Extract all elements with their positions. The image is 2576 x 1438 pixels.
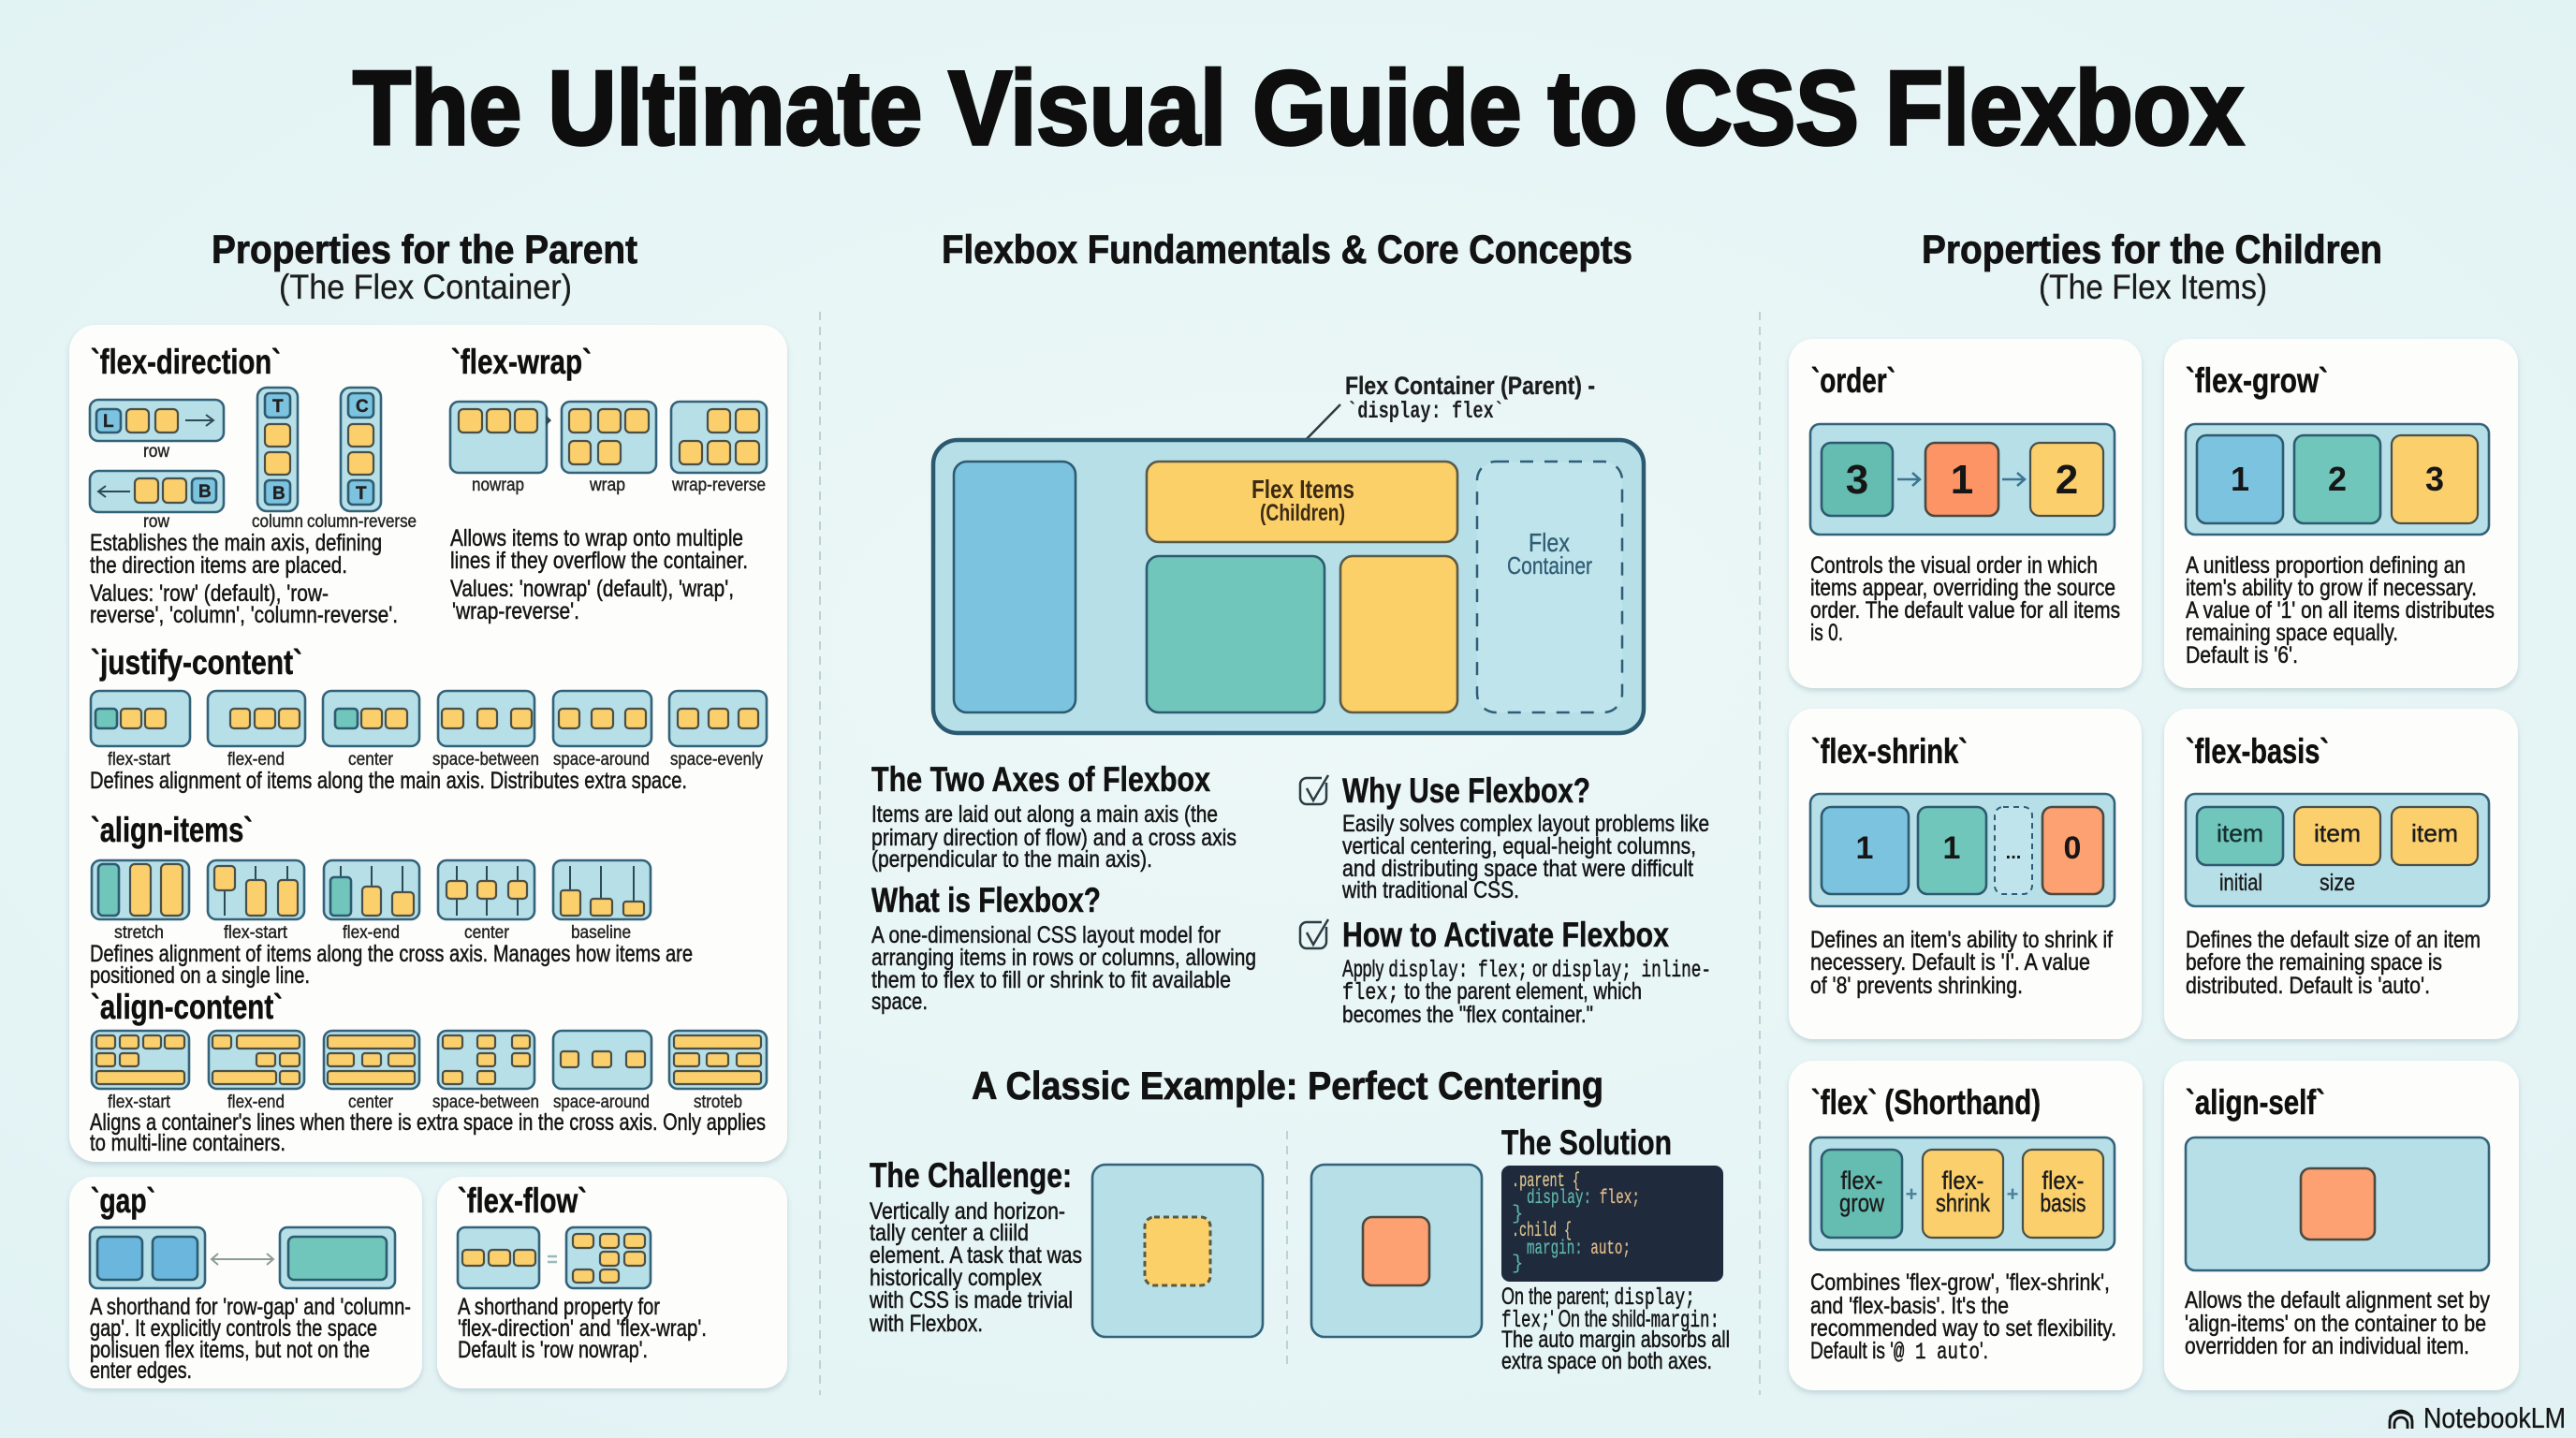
card: order: is 0. [1810, 620, 1843, 646]
flex-grow diagram: 2 [2328, 460, 2347, 498]
order diagram: 3 [1846, 457, 1868, 503]
diagram callout label: Flex Container (Parent) - [1345, 372, 1595, 400]
card: flex-grow: A unitless proportion defining an [2186, 552, 2466, 579]
flex items: Flex Items [1251, 475, 1354, 504]
align-items section [90, 811, 693, 989]
diagram callout label [1296, 372, 1595, 449]
text: why use flexbox: vertical centering, equal-height columns, [1342, 833, 1696, 859]
flex-direction section: row [143, 442, 169, 462]
the challenge [869, 1156, 1082, 1337]
align-items section: flex-end [343, 923, 400, 943]
flex-direction section [90, 343, 417, 628]
card: flex shorthand: recommended way to set flexibility. [1810, 1315, 2116, 1342]
flex-wrap section: Values: 'nowrap' (default), 'wrap', [450, 576, 734, 602]
text: how to activate flexbox [1300, 916, 1711, 1028]
flex shorthand diagram: shrink [1936, 1189, 1990, 1217]
card: flex-grow [2164, 339, 2518, 688]
card: flex-shrink: necessery. Default is 'I'. A value [1810, 949, 2090, 976]
align-items section: baseline [571, 923, 631, 943]
flex-direction section: B [198, 482, 212, 502]
flex-basis diagram: item [2411, 819, 2458, 847]
flex-direction section: T [272, 397, 284, 417]
code block: display: flex; [1527, 1188, 1640, 1210]
align-content section: stroteb [694, 1093, 742, 1112]
text: how to activate flexbox: becomes the "flex container." [1342, 1002, 1593, 1028]
the challenge: historically complex [870, 1265, 1042, 1291]
title: The Ultimate Visual Guide to CSS Flexbox [353, 50, 2244, 167]
flex shorthand diagram: grow [1839, 1189, 1884, 1217]
card: flex-shrink: of '8' prevents shrinking. [1810, 973, 2023, 999]
card: flex-basis: distributed. Default is 'auto'. [2186, 973, 2430, 999]
flex-basis diagram: size [2320, 870, 2355, 896]
card: order: items appear, overriding the source [1810, 575, 2115, 601]
the challenge: The Challenge: [870, 1156, 1072, 1195]
align-items section: positioned on a single line. [90, 962, 310, 989]
flex-grow diagram: 3 [2425, 460, 2444, 498]
justify-content section: Defines alignment of items along the main axis. Distributes extra space. [90, 768, 687, 794]
icon: checkbox [1300, 775, 1328, 804]
flex-shrink diagram [1810, 794, 2115, 906]
text: two axes [871, 760, 1237, 873]
justify-content section: center [348, 750, 394, 770]
align-content section: space-between [432, 1093, 539, 1112]
heading: children properties: (The Flex Items) [2039, 268, 2267, 306]
align-content section: flex-start [108, 1093, 171, 1112]
card: align-self: overridden for an individual item. [2185, 1333, 2469, 1359]
flex shorthand diagram: + [2007, 1182, 2018, 1206]
text: two axes: primary direction of flow) and a cross axis [871, 825, 1237, 851]
code block: } [1512, 1254, 1524, 1275]
the challenge: element. A task that was [870, 1242, 1082, 1269]
code block: margin: auto; [1527, 1239, 1631, 1260]
flex-wrap section [450, 343, 767, 624]
text: what is flexbox: What is Flexbox? [871, 881, 1101, 919]
panel: gap [69, 1177, 422, 1388]
heading: children properties [1922, 227, 2382, 306]
flex-wrap section: 'wrap-reverse'. [452, 598, 579, 624]
card: flex shorthand: Default is '@ 1 auto'. [1810, 1338, 1988, 1366]
flex-direction section: Establishes the main axis, defining [90, 530, 382, 556]
text: how to activate flexbox: Apply display: flex; or display; inline- [1342, 956, 1711, 984]
code block [1501, 1166, 1723, 1282]
flex container diagram [933, 372, 1644, 733]
flex shorthand diagram: basis [2041, 1189, 2086, 1217]
text: why use flexbox [1300, 771, 1709, 903]
panel: gap: gap'. It explicitly controls the space [90, 1315, 377, 1342]
card: align-self: Allows the default alignment set by [2185, 1287, 2490, 1313]
flex-shrink diagram: 1 [1943, 830, 1960, 866]
code block: .parent { [1512, 1171, 1580, 1193]
text: why use flexbox: and distributing space that were difficult [1342, 856, 1693, 882]
align-content section: center [348, 1093, 394, 1112]
align-items section: stretch [114, 923, 164, 943]
card: flex-basis: before the remaining space is [2186, 949, 2442, 976]
panel: flex-flow: Default is 'row nowrap'. [458, 1337, 648, 1363]
align-content section: flex-end [227, 1093, 285, 1112]
text: two axes: (perpendicular to the main axis). [871, 846, 1152, 873]
panel: flex container properties [69, 325, 787, 1162]
text: why use flexbox: Why Use Flexbox? [1342, 771, 1590, 810]
flex-direction section: T [356, 484, 367, 504]
flex-shrink diagram: ... [2006, 843, 2021, 863]
justify-content section: space-between [432, 750, 539, 770]
justify-content section: space-around [553, 750, 650, 770]
diagram: centered box [1311, 1165, 1482, 1337]
heading: children properties: Properties for the Children [1922, 227, 2382, 272]
order diagram [1810, 424, 2115, 535]
flex-basis diagram: initial [2219, 870, 2262, 896]
align-content section: `align-content` [91, 988, 283, 1026]
justify-content section: flex-start [108, 750, 171, 770]
align-self diagram [2186, 1137, 2489, 1270]
card: flex-shrink [1789, 709, 2142, 1039]
flex-basis diagram: item [2314, 819, 2361, 847]
flex-flow diagram [458, 1227, 651, 1288]
card: flex shorthand: Combines 'flex-grow', 'flex-shrink', [1810, 1269, 2110, 1296]
panel: flex-flow [437, 1177, 787, 1388]
flex-direction section: B [272, 484, 285, 504]
panel: gap: enter edges. [90, 1357, 192, 1384]
text: how to activate flexbox: How to Activate Flexbox [1342, 916, 1669, 954]
card: order [1789, 339, 2142, 688]
panel: gap: polisuen flex items, but not on the [90, 1337, 370, 1363]
flex-shrink diagram: 0 [2064, 830, 2081, 866]
the solution: flex;' On the shild-margin: [1501, 1306, 1720, 1334]
flex-direction section: reverse', 'column', 'column-reverse'. [90, 602, 398, 628]
flex-shrink diagram: 1 [1856, 830, 1873, 866]
panel: flex-flow: `flex-flow` [458, 1181, 587, 1220]
card: flex-grow: remaining space equally. [2186, 620, 2398, 646]
card: flex-basis: `flex-basis` [2186, 732, 2329, 770]
flex shorthand diagram [1810, 1137, 2115, 1250]
justify-content section: `justify-content` [91, 643, 302, 682]
flex-basis diagram [2186, 794, 2489, 906]
heading: parent properties: Properties for the Parent [212, 227, 637, 272]
the challenge: Vertically and horizon- [870, 1198, 1065, 1225]
card: flex-grow: A value of '1' on all items distributes [2186, 597, 2495, 624]
dashed flex container region: Flex [1529, 528, 1570, 557]
card: flex shorthand: `flex` (Shorthand) [1811, 1083, 2041, 1122]
panel: gap: `gap` [91, 1181, 155, 1220]
text: two axes: The Two Axes of Flexbox [871, 760, 1210, 799]
flex-wrap section: wrap [589, 476, 625, 495]
align-items section: flex-start [224, 923, 288, 943]
flex-grow diagram: 1 [2231, 460, 2249, 498]
flex-direction section: Values: 'row' (default), 'row- [90, 580, 329, 607]
align-items section: center [464, 923, 510, 943]
diagram callout label: `display: flex` [1347, 398, 1504, 425]
code block: } [1512, 1204, 1524, 1225]
card: flex-grow: Default is '6'. [2186, 642, 2298, 668]
text: why use flexbox: Easily solves complex layout problems like [1342, 811, 1709, 837]
text: what is flexbox: them to flex to fill or shrink to fit available [871, 967, 1231, 993]
text: two axes: Items are laid out along a main axis (the [871, 801, 1218, 828]
card: flex-grow: item's ability to grow if necessary. [2186, 575, 2477, 601]
text: why use flexbox: with traditional CSS. [1341, 877, 1519, 903]
order diagram: 2 [2056, 457, 2078, 503]
card: flex-shrink: `flex-shrink` [1811, 732, 1968, 770]
align-content section: Aligns a container's lines when there is extra space in the cross axis. Only applies [90, 1109, 766, 1136]
text: how to activate flexbox: flex; to the parent element, which [1342, 978, 1642, 1006]
justify-content section: space-evenly [670, 750, 763, 770]
flex items [1147, 462, 1457, 542]
panel: gap: A shorthand for 'row-gap' and 'column- [90, 1294, 411, 1320]
dashed flex container region [1477, 462, 1622, 712]
flex-direction section: `flex-direction` [91, 343, 281, 381]
text: what is flexbox: A one-dimensional CSS layout model for [871, 922, 1221, 948]
flex-basis diagram: item [2217, 819, 2263, 847]
align-content section: space-around [553, 1093, 650, 1112]
flex-grow diagram [2186, 424, 2489, 535]
align-content section [90, 988, 767, 1156]
code block: .child { [1512, 1221, 1572, 1242]
text: what is flexbox [871, 881, 1256, 1015]
flex items: (Children) [1260, 500, 1345, 526]
flex shorthand diagram: flex- [1941, 1167, 1984, 1195]
card: align-self [2164, 1061, 2519, 1390]
card: align-self: `align-self` [2186, 1083, 2325, 1122]
the solution: extra space on both axes. [1501, 1348, 1712, 1374]
card: flex shorthand: and 'flex-basis'. It's the [1810, 1293, 2009, 1319]
flex-direction section: the direction items are placed. [90, 552, 347, 579]
card: flex-basis [2164, 709, 2518, 1039]
flex-wrap section: nowrap [472, 476, 524, 495]
flex-wrap section: lines if they overflow the container. [450, 548, 748, 574]
heading: fundamentals: Flexbox Fundamentals & Core Concepts [942, 227, 1632, 272]
flex shorthand diagram: + [1906, 1182, 1917, 1206]
the challenge: with CSS is made trivial [869, 1287, 1073, 1313]
flex-direction section: column [252, 512, 303, 532]
card: order: Controls the visual order in which [1810, 552, 2098, 579]
justify-content section: flex-end [227, 750, 285, 770]
card: align-self: 'align-items' on the container to be [2185, 1311, 2486, 1337]
diagram: uncentered box [1092, 1165, 1263, 1337]
align-items section: Defines alignment of items along the cross axis. Manages how items are [90, 941, 693, 967]
panel: flex-flow: A shorthand property for [458, 1294, 660, 1320]
panel: flex-flow: 'flex-direction' and 'flex-wrap'. [458, 1315, 707, 1342]
flex-direction section: C [356, 397, 369, 417]
the challenge: with Flexbox. [869, 1311, 983, 1337]
flex-wrap section: wrap-reverse [671, 476, 766, 495]
card: order: order. The default value for all items [1810, 597, 2120, 624]
card: flex-grow: `flex-grow` [2186, 361, 2328, 400]
the solution: On the parent; display; [1501, 1284, 1695, 1312]
icon: checkbox [1300, 919, 1328, 948]
heading: parent properties: (The Flex Container) [279, 268, 572, 306]
the solution: The auto margin absorbs all [1501, 1327, 1730, 1353]
text: what is flexbox: space. [871, 989, 928, 1015]
flex shorthand diagram: flex- [1840, 1167, 1883, 1195]
align-content section: to multi-line containers. [90, 1130, 285, 1156]
card: flex-basis: Defines the default size of an item [2186, 927, 2481, 953]
the solution: The Solution [1501, 1123, 1672, 1162]
flex-direction section: row [143, 512, 169, 532]
gap diagram [90, 1227, 395, 1288]
flex-wrap section: `flex-wrap` [451, 343, 592, 381]
flex shorthand diagram: flex- [2042, 1167, 2084, 1195]
align-items section: `align-items` [91, 811, 253, 849]
card: flex-shrink: Defines an item's ability to shrink if [1810, 927, 2113, 953]
heading: parent properties [212, 227, 637, 306]
flex-direction section: L [103, 412, 114, 432]
the challenge: tally center a cliild [870, 1220, 1029, 1246]
flex-wrap section: Allows items to wrap onto multiple [450, 525, 743, 551]
heading: perfect centering example: A Classic Example: Perfect Centering [972, 1064, 1603, 1108]
order diagram: 1 [1951, 457, 1973, 503]
icon: NotebookLM mark [2390, 1411, 2412, 1429]
the solution [1501, 1123, 1730, 1374]
flex-direction section: column-reverse [307, 512, 417, 532]
dashed flex container region: Container [1507, 551, 1592, 580]
justify-content section [90, 643, 767, 794]
card: flex shorthand [1789, 1061, 2143, 1390]
card: order: `order` [1811, 361, 1895, 400]
text: what is flexbox: arranging items in rows or columns, allowing [871, 945, 1256, 971]
